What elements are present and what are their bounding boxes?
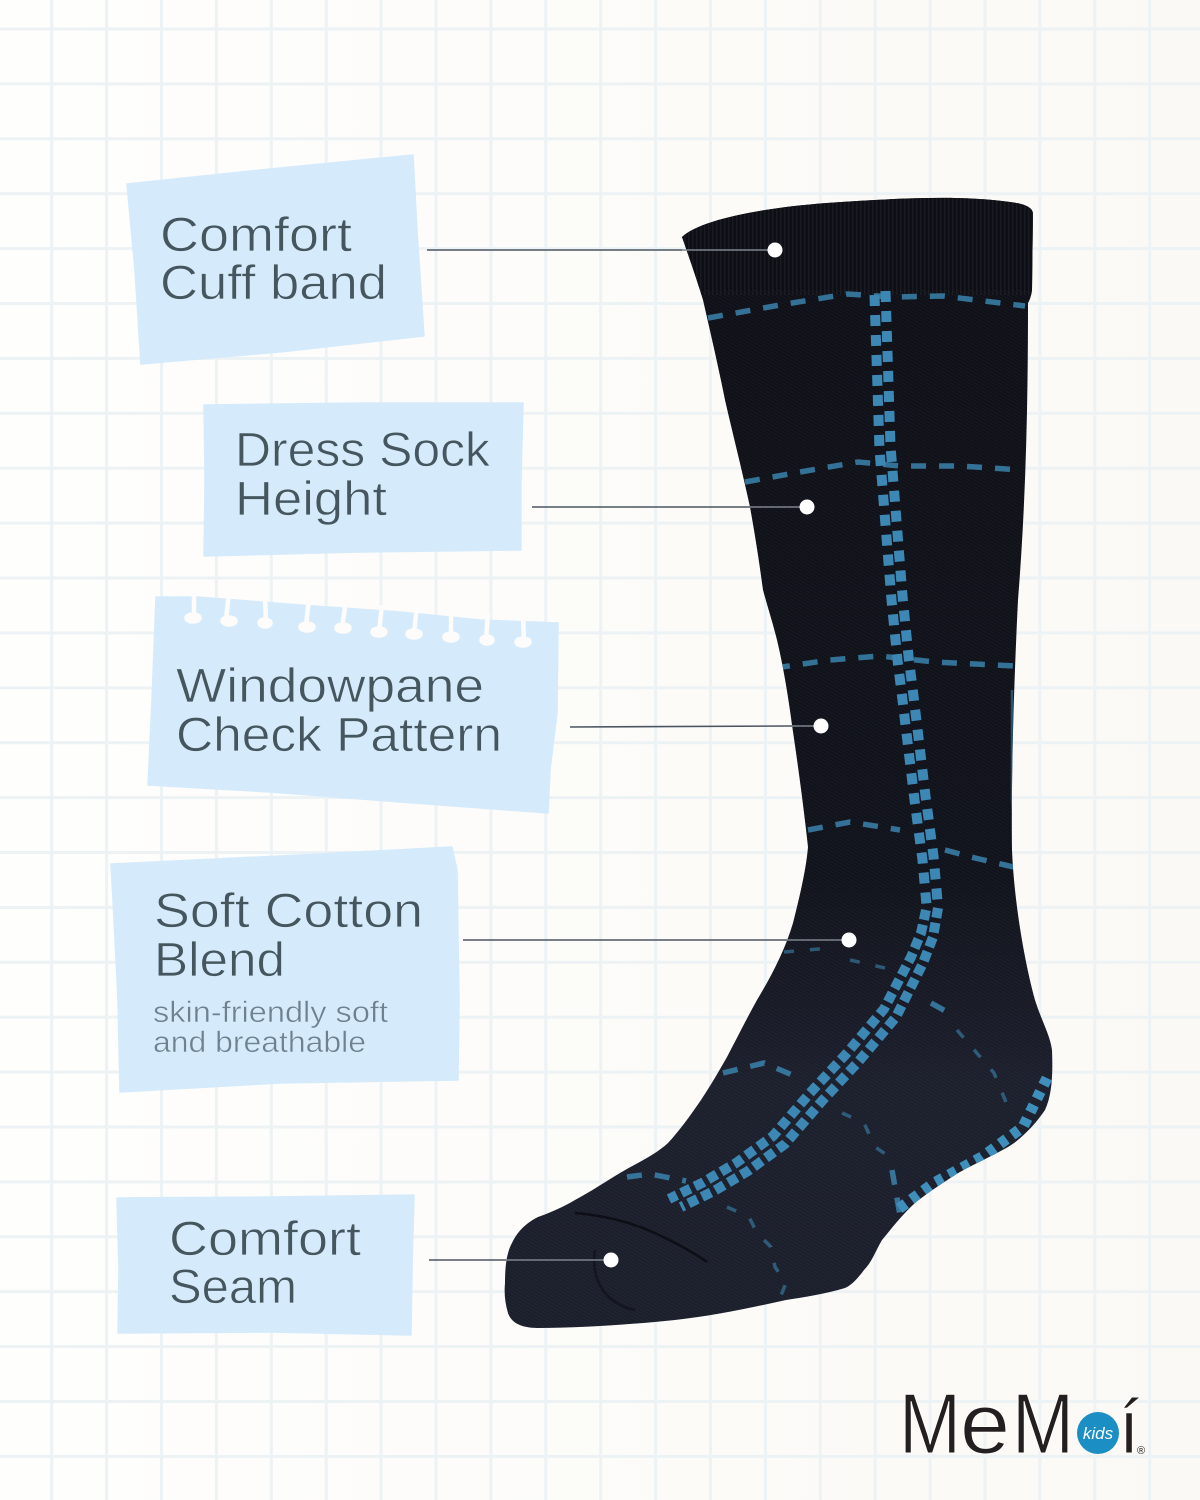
callout line: comfort seam xyxy=(429,1252,618,1268)
logo: MeMoi kids: M xyxy=(899,1377,961,1472)
label: soft cotton blend: and breathable xyxy=(153,1026,366,1059)
label: soft cotton blend: Blend xyxy=(154,934,285,987)
callout line: cotton blend xyxy=(463,932,856,948)
logo: MeMoi kids: M xyxy=(1012,1377,1074,1472)
sock body xyxy=(505,198,1052,1328)
label: soft cotton blend: skin-friendly soft xyxy=(153,996,389,1029)
callout line: sock height xyxy=(532,500,814,514)
label: windowpane check pattern notepad: Check Pattern xyxy=(176,709,502,762)
label: comfort cuff band xyxy=(127,155,424,364)
label: comfort seam xyxy=(117,1195,414,1335)
logo: MeMoi kids: ® xyxy=(1137,1445,1145,1457)
label: comfort seam: Comfort xyxy=(169,1213,361,1266)
label: comfort cuff band: Comfort xyxy=(160,209,352,262)
label: windowpane check pattern notepad: Windowpane xyxy=(176,660,484,713)
central vertical band upper xyxy=(874,295,926,905)
callout line: check pattern xyxy=(570,718,828,734)
logo: MeMoi kids: kids xyxy=(1083,1424,1114,1443)
logo: MeMoi kids: e xyxy=(960,1377,1010,1472)
label: dress sock height xyxy=(204,403,523,556)
label: comfort seam: Seam xyxy=(169,1261,297,1314)
central band lower diagonal xyxy=(669,910,926,1199)
toe seam xyxy=(575,1213,707,1262)
label: dress sock height: Dress Sock xyxy=(235,424,491,477)
callout line: cuff band xyxy=(427,242,782,258)
sock product photo xyxy=(490,190,1060,1340)
sock stitching pattern xyxy=(575,198,1052,1311)
notepad punched holes xyxy=(186,590,530,646)
logo: MeMoi kids: í xyxy=(1118,1385,1140,1470)
label: windowpane check pattern notepad xyxy=(148,590,558,813)
logo: MeMoi kids xyxy=(899,1377,1145,1472)
label: soft cotton blend xyxy=(111,847,459,1092)
label: comfort cuff band: Cuff band xyxy=(160,257,387,310)
label: dress sock height: Height xyxy=(235,473,387,526)
label: soft cotton blend: Soft Cotton xyxy=(154,885,423,938)
